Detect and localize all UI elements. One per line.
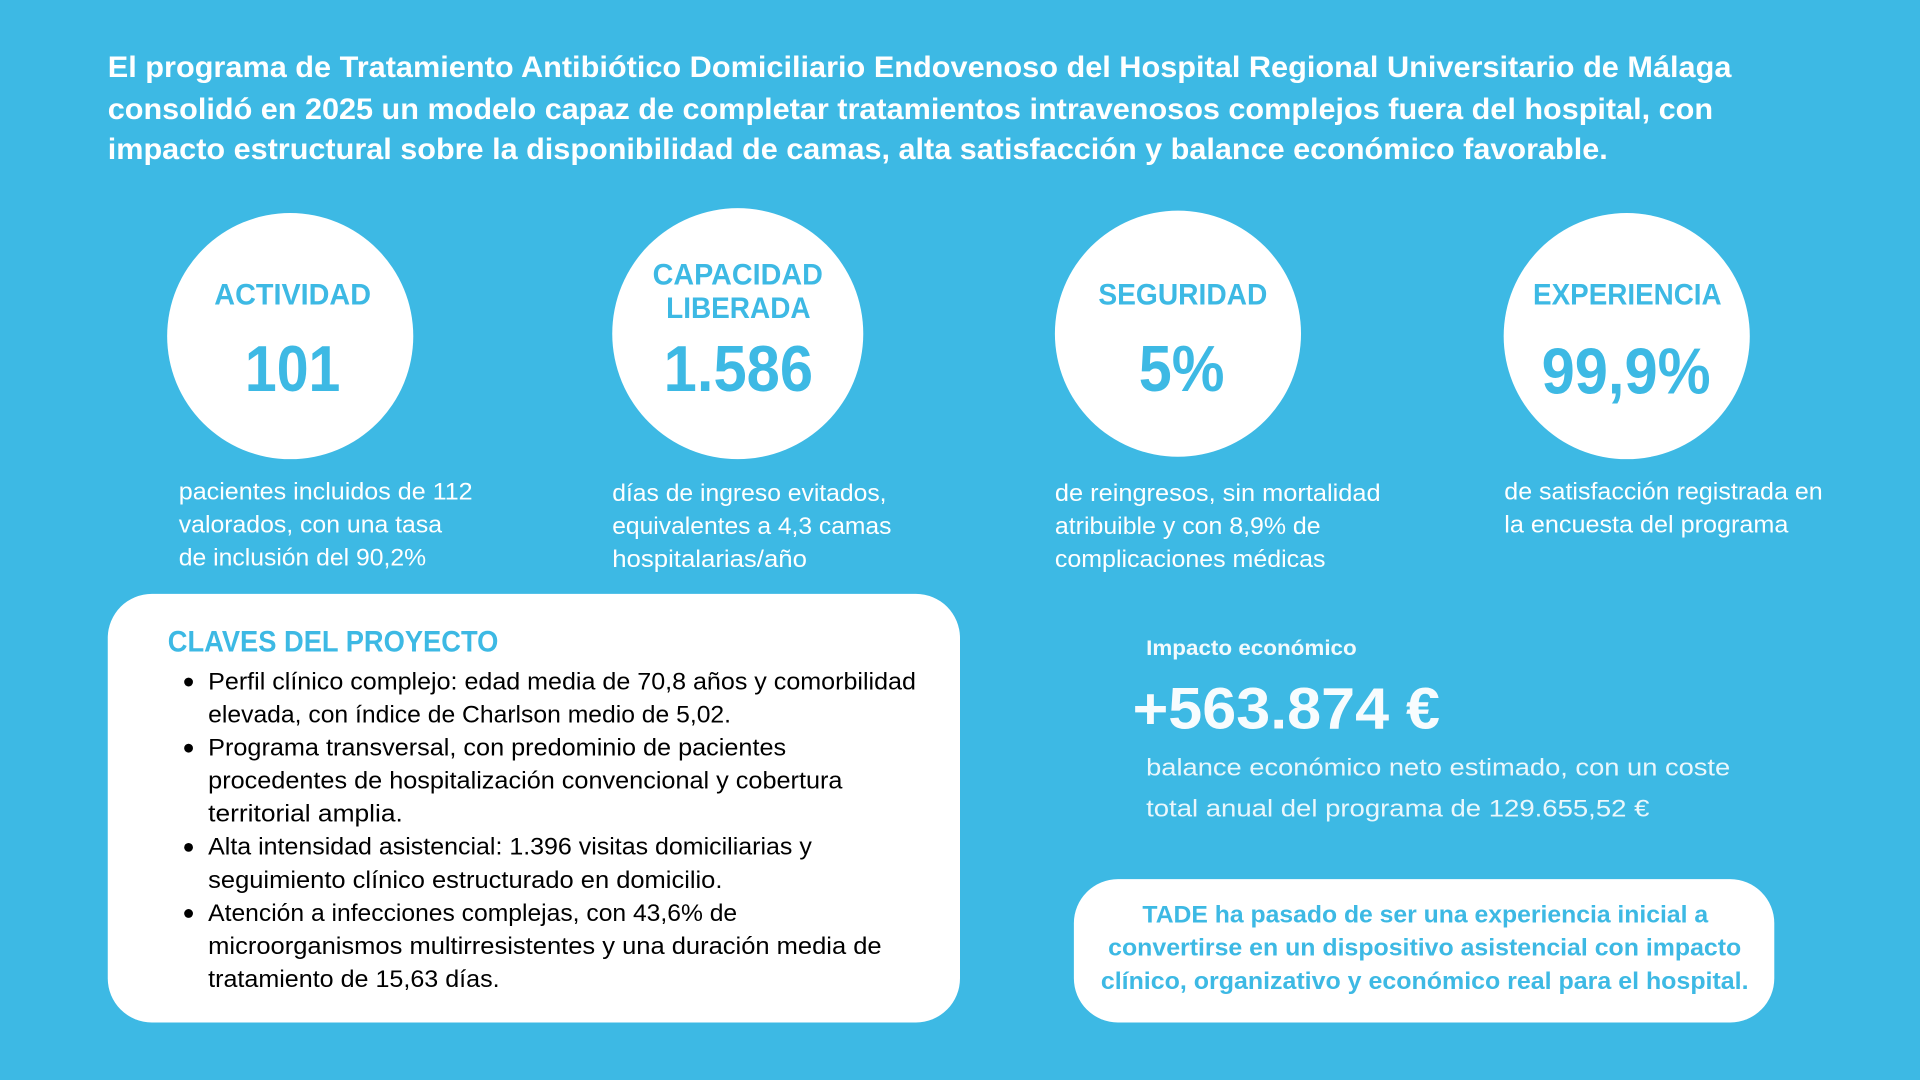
bullet: alta intensidad xyxy=(184,834,813,894)
description: experiencia xyxy=(1504,479,1823,539)
bullet: perfil clínico: Perfil clínico complejo: edad media de 70,8 años y comorbilidad xyxy=(208,668,916,695)
title paragraph xyxy=(108,51,1732,166)
title paragraph: consolidó en 2025 un modelo capaz de completar tratamientos intravenosos complejos fuera del hospital, con xyxy=(108,93,1713,126)
circle: seguridad xyxy=(1055,211,1301,457)
label: capacidad liberada: LIBERADA xyxy=(666,292,811,325)
number: balance: +563.874 € xyxy=(1133,677,1440,742)
panel: claves del proyecto xyxy=(108,594,960,1022)
callout text xyxy=(1101,902,1749,995)
bullet: alta intensidad: seguimiento clínico estructurado en domicilio. xyxy=(208,867,722,894)
callout text: convertirse en un dispositivo asistencial con impacto xyxy=(1108,935,1741,962)
description: capacidad liberada: hospitalarias/año xyxy=(612,546,807,573)
number: 1.586: 1.586 xyxy=(664,332,813,405)
circle: capacidad liberada xyxy=(612,208,863,459)
bullet: programa transversal: procedentes de hospitalización convencional y cobertura xyxy=(208,768,843,795)
label: capacidad liberada xyxy=(653,259,823,325)
callout: conclusión TADE xyxy=(1074,879,1774,1022)
panel: experiencia xyxy=(1504,213,1823,539)
bullet: programa transversal: Programa transversal, con predominio de pacientes xyxy=(208,735,786,762)
heading: claves del proyecto: CLAVES DEL PROYECTO xyxy=(168,625,498,658)
bullet: programa transversal: territorial amplia. xyxy=(208,801,403,828)
bullet: perfil clínico: elevada, con índice de Charlson medio de 5,02. xyxy=(208,701,731,728)
description: actividad: pacientes incluidos de 112 xyxy=(179,479,473,506)
panel: capacidad liberada xyxy=(612,208,891,573)
description: seguridad: atribuible y con 8,9% de xyxy=(1055,513,1321,540)
bullet: programa transversal xyxy=(184,735,843,828)
number: 101: 101 xyxy=(245,332,340,405)
description: balance xyxy=(1146,755,1730,823)
callout text: clínico, organizativo y económico real para el hospital. xyxy=(1101,968,1749,995)
circle: experiencia xyxy=(1504,213,1750,459)
description: capacidad liberada xyxy=(612,480,891,573)
bullet: infecciones complejas xyxy=(184,900,882,993)
label: impacto económico: Impacto económico xyxy=(1146,637,1357,660)
description: experiencia: la encuesta del programa xyxy=(1504,512,1789,539)
description: seguridad: de reingresos, sin mortalidad xyxy=(1055,480,1381,507)
panel background xyxy=(108,594,960,1022)
bullet: alta intensidad: Alta intensidad asistencial: 1.396 visitas domiciliarias y xyxy=(208,834,813,861)
description: actividad xyxy=(179,479,473,572)
description: capacidad liberada: días de ingreso evitados, xyxy=(612,480,887,507)
label: experiencia: EXPERIENCIA xyxy=(1533,278,1722,311)
bullet: infecciones complejas: tratamiento de 15,63 días. xyxy=(208,966,500,993)
title paragraph: impacto estructural sobre la disponibilidad de camas, alta satisfacción y balance económico favorable. xyxy=(108,133,1608,166)
description: actividad: de inclusión del 90,2% xyxy=(179,545,426,572)
bullet: infecciones complejas: microorganismos multirresistentes y una duración media de xyxy=(208,933,882,960)
label: actividad: ACTIVIDAD xyxy=(214,278,371,311)
number: 99,9%: 99,9% xyxy=(1542,335,1711,408)
description: balance: balance económico neto estimado, con un coste xyxy=(1146,755,1730,782)
panel: seguridad xyxy=(1055,211,1381,573)
callout text: TADE ha pasado de ser una experiencia inicial a xyxy=(1142,902,1709,929)
panel: impacto económico xyxy=(1133,637,1730,823)
description: experiencia: de satisfacción registrada en xyxy=(1504,479,1823,506)
number: 5%: 5% xyxy=(1139,332,1224,405)
label: seguridad: SEGURIDAD xyxy=(1098,278,1267,311)
description: capacidad liberada: equivalentes a 4,3 camas xyxy=(612,513,891,540)
bullet: infecciones complejas: Atención a infecciones complejas, con 43,6% de xyxy=(208,900,737,927)
label: capacidad liberada: CAPACIDAD xyxy=(653,259,823,292)
bullet: perfil clínico xyxy=(184,668,916,728)
callout background xyxy=(1074,879,1774,1022)
description: seguridad: complicaciones médicas xyxy=(1055,546,1326,573)
description: seguridad xyxy=(1055,480,1381,573)
title paragraph: El programa de Tratamiento Antibiótico Domiciliario Endovenoso del Hospital Regional Universitario de Málaga xyxy=(108,51,1732,84)
panel: actividad xyxy=(167,213,473,572)
description: actividad: valorados, con una tasa xyxy=(179,512,442,539)
circle: actividad xyxy=(167,213,413,459)
description: balance: total anual del programa de 129.655,52 € xyxy=(1146,796,1650,823)
